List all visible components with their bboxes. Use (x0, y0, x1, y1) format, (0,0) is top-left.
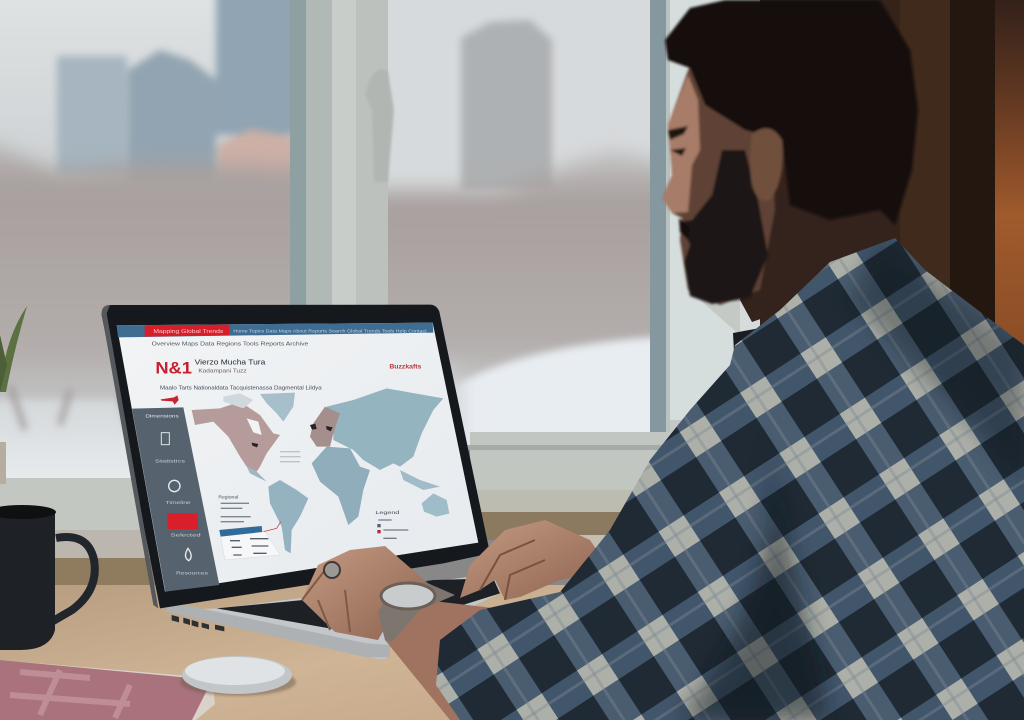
browser bar (117, 323, 433, 337)
neck (740, 150, 900, 322)
left hand on keyboard (302, 546, 430, 640)
callout: stats (218, 494, 251, 522)
plant (0, 306, 27, 484)
Arctic islands (223, 393, 253, 408)
face (662, 60, 775, 305)
screen (117, 323, 478, 592)
world map (192, 388, 449, 560)
hair (665, 0, 918, 225)
ring (324, 562, 340, 578)
left sidebar: Dimensions (145, 414, 179, 420)
mouse (180, 656, 296, 696)
Asia (327, 388, 443, 470)
left sidebar: Statistics (155, 459, 185, 464)
centre window pane with tower (388, 0, 650, 445)
Central America (247, 467, 267, 482)
mug (0, 505, 95, 650)
Europe (310, 407, 340, 447)
red logo: N&1 (155, 358, 192, 377)
sub-navigation: Maalo Tarts Nationaldata Tacquistenassa Dagmental Lildya (160, 385, 323, 391)
eye and brow (668, 126, 688, 156)
laptop lid (102, 305, 490, 608)
Hudson Bay (247, 418, 262, 435)
sidebar icon: document (161, 433, 169, 445)
right hand (460, 520, 610, 600)
sidebar icon: clock (169, 480, 180, 492)
lit side of the face (662, 75, 700, 213)
legend (375, 510, 408, 538)
nav text: Overview Maps Data Regions Tools Reports Archive (152, 341, 308, 347)
beard (680, 150, 768, 304)
Greenland (260, 393, 295, 422)
Australia (422, 493, 449, 517)
Africa (312, 447, 370, 525)
North America (192, 402, 280, 472)
forearm (385, 600, 510, 720)
head (662, 0, 918, 305)
sidebar icon: drop (185, 548, 191, 561)
small data note (280, 452, 301, 462)
left sidebar (132, 407, 219, 592)
ear (750, 128, 783, 201)
man (302, 0, 1024, 720)
Southeast Asia (400, 470, 440, 490)
legend: Legend (375, 510, 400, 515)
left window pane with blurred skyline (0, 0, 290, 478)
laptop (102, 305, 500, 659)
South America (268, 480, 308, 553)
red pointer (161, 395, 179, 405)
data table (219, 522, 281, 560)
left sidebar: Resources (176, 571, 208, 576)
wristwatch (378, 582, 455, 642)
shirt body and sleeve (436, 238, 1024, 720)
screen title (195, 358, 266, 374)
browser bar: Home Topics Data Maps About Reports Search Global Trends Tools Help Contact (233, 329, 427, 335)
laptop base (166, 573, 500, 659)
curtain and dark wall (760, 0, 1024, 360)
dark collar tie (733, 328, 760, 355)
screen title: Vierzo Mucha Tura (195, 358, 266, 367)
lower sill and wood ledge (0, 490, 660, 600)
moustache (679, 218, 690, 240)
bright window strip behind the face (670, 0, 740, 420)
top-right badge: Buzzkafts (389, 365, 422, 371)
browser bar: Mapping Global Trends (153, 329, 224, 335)
map markers (252, 424, 333, 447)
screen title: Kadampani Tuzz (198, 368, 247, 374)
sidebar button: red (167, 513, 198, 529)
callout: stats: Regional (218, 494, 238, 499)
lid left edge highlight (102, 305, 158, 608)
left sidebar: Selected (171, 533, 202, 538)
table (0, 585, 760, 720)
window frame (0, 0, 778, 533)
left sidebar: Timeline (166, 500, 192, 505)
book (0, 660, 215, 720)
